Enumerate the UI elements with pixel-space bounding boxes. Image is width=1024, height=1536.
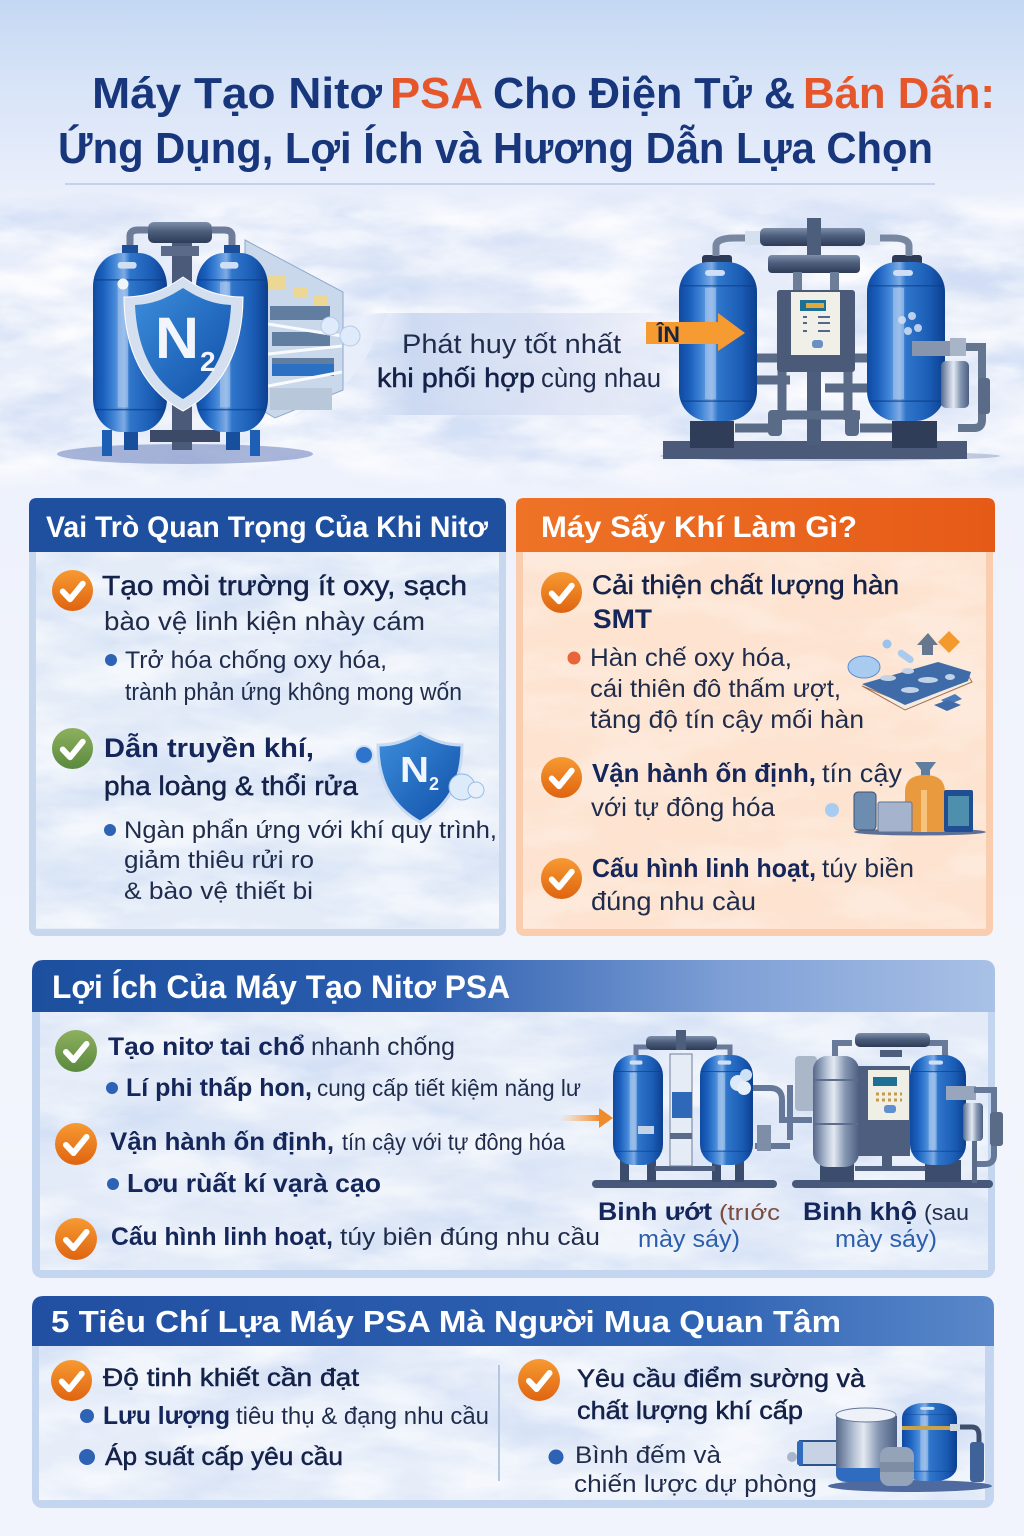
illustration: nitrogen generator with N2 shield and factory bbox=[57, 222, 388, 464]
panel: what an air dryer does bbox=[516, 498, 995, 936]
panel: 5 buying criteria bbox=[32, 1296, 994, 1508]
background sky and clouds bbox=[0, 0, 1024, 491]
icon: check bbox=[541, 858, 582, 899]
heading: benefits: Lợi Ích Của Máy Tạo Nitơ PSA bbox=[52, 969, 510, 1005]
text: purity: Độ tinh khiết cần đạt bbox=[103, 1364, 359, 1392]
text block: carrier gas: pha loàng & thổi rửa bbox=[104, 771, 359, 801]
text block: low oxygen environment: bào vệ linh kiện nhày cám bbox=[104, 606, 425, 636]
bullet text: limit oxidation: cái thiên đô thấm ượt, bbox=[590, 675, 841, 703]
icon: check bbox=[51, 1360, 92, 1401]
label: wet tank: (trıớc bbox=[719, 1200, 780, 1225]
bullet text: inert: Trở hóa chống oxy hóa, bbox=[125, 647, 387, 674]
text: on-site nitrogen bbox=[108, 1033, 455, 1061]
callout: best when combined: khi phối hợp bbox=[377, 363, 535, 393]
text: flexible configuration: Cấu hình linh hoạt, bbox=[111, 1223, 333, 1251]
title: Cho Điện Tử & bbox=[493, 69, 795, 118]
icon: green check bbox=[55, 1030, 97, 1072]
text block: stable operation: tín cậy bbox=[822, 758, 902, 788]
text block: flexible configuration: đúng nhu càu bbox=[591, 886, 756, 916]
label: wet tank: Binh ướt bbox=[598, 1198, 713, 1226]
heading: air dryer: Máy Sấy Khí Làm Gì? bbox=[541, 511, 857, 544]
text: dew point bbox=[577, 1365, 865, 1425]
bullet text: inert: trành phản ứng không mong wốn bbox=[125, 679, 462, 706]
text: flexible configuration bbox=[111, 1223, 600, 1251]
icon: N2 shield: 2 bbox=[429, 774, 439, 794]
text: dew point: chất lượng khí cấp bbox=[577, 1397, 803, 1425]
bullet text: low cost: cung cấp tiết kiệm năng lư bbox=[317, 1075, 581, 1101]
bullet text: avoid reaction bbox=[104, 817, 497, 905]
panel: benefits of PSA nitrogen generator bbox=[32, 960, 1003, 1278]
icon: check bbox=[55, 1123, 97, 1165]
text: on-site nitrogen: nhanh chống bbox=[311, 1033, 455, 1061]
text block: SMT soldering bbox=[592, 570, 899, 634]
label: dry tank: (sau bbox=[924, 1200, 969, 1225]
bullet text: avoid reaction: & bào vệ thiết bi bbox=[124, 878, 313, 905]
text block: flexible configuration bbox=[591, 853, 914, 916]
text block: SMT soldering: SMT bbox=[593, 604, 653, 634]
text block: flexible configuration: Cấu hình linh hoạt, bbox=[592, 853, 816, 883]
bullet text: pressure: Áp suất cấp yêu cầu bbox=[105, 1442, 343, 1471]
text: flexible configuration: túy biên đúng nhu cầu bbox=[340, 1224, 600, 1251]
panel: role of nitrogen bbox=[29, 498, 506, 936]
icon: check bbox=[52, 570, 93, 611]
heading: criteria: 5 Tiêu Chí Lựa Máy PSA Mà Người Mua Quan Tâm bbox=[51, 1304, 841, 1339]
icon: check bbox=[518, 1359, 560, 1401]
illustration: tanks and pipes bbox=[787, 1403, 992, 1492]
bullet text: flow rate: tiêu thụ & đạng nhu cầu bbox=[236, 1403, 489, 1430]
text: stable operation: tín cậy với tự đông hóa bbox=[342, 1129, 565, 1155]
bullet text: limit oxidation: Hàn chế oxy hóa, bbox=[590, 644, 792, 672]
illustration: nitrogen generator with N2 shield and factory: 2 bbox=[200, 346, 216, 377]
illustration: dry tank system bbox=[753, 1033, 1003, 1188]
text block: carrier gas bbox=[104, 732, 359, 801]
bullet text: avoid reaction: giảm thiêu rửi ro bbox=[124, 847, 314, 874]
callout: best when combined: cùng nhau bbox=[541, 363, 661, 393]
text block: stable operation: với tự đông hóa bbox=[591, 792, 776, 822]
bullet text: flow rate: Lưu lượng bbox=[103, 1402, 230, 1430]
text block: stable operation: Vận hành ốn định, bbox=[592, 758, 816, 788]
icon: check bbox=[541, 572, 582, 613]
icon: N2 shield: N bbox=[400, 749, 429, 790]
text: on-site nitrogen: Tạo nitơ tai chổ bbox=[108, 1033, 305, 1061]
icon: gas equipment bbox=[825, 762, 986, 836]
bullet text: low cost bbox=[106, 1074, 581, 1102]
arrow: IN: ÎN bbox=[656, 322, 680, 347]
label: dry tank: mày sáy) bbox=[835, 1226, 937, 1253]
arrow: flow bbox=[560, 1108, 613, 1128]
icon: check bbox=[55, 1218, 97, 1260]
bullet text: buffer tank: Bình đếm và bbox=[575, 1442, 722, 1469]
text: dew point: Yêu cầu điểm sường và bbox=[577, 1365, 865, 1393]
label: dry tank: Binh khộ bbox=[803, 1198, 917, 1226]
bullet text: limit oxidation bbox=[568, 644, 864, 734]
bullet text: buffer tank bbox=[548, 1442, 817, 1498]
illustration: air dryer machine bbox=[660, 218, 1000, 461]
title: Ứng Dụng, Lợi Ích và Hương Dẫn Lựa Chọn bbox=[58, 123, 933, 173]
icon: circuit board bbox=[848, 631, 972, 711]
illustration: nitrogen generator with N2 shield and factory: N bbox=[155, 306, 199, 371]
bullet text: limit oxidation: tăng độ tín cậy mối hàn bbox=[590, 706, 864, 734]
bullet text: avoid reaction: Ngàn phẩn ứng với khí quy trình, bbox=[124, 817, 497, 844]
bullet text: low cost: Lí phi thấp hon, bbox=[126, 1074, 312, 1102]
text: stable operation: Vận hành ốn định, bbox=[110, 1128, 334, 1156]
title bbox=[58, 69, 995, 173]
illustration: wet tank system bbox=[592, 1030, 777, 1188]
title: Máy Tạo Nitơ bbox=[92, 69, 383, 118]
text block: flexible configuration: túy biền bbox=[822, 853, 914, 883]
bullet text: Lơu rùất kí vạrà cạo bbox=[127, 1168, 381, 1198]
text block: SMT soldering: Cải thiện chất lượng hàn bbox=[592, 570, 899, 600]
label: wet tank bbox=[598, 1198, 780, 1253]
text: stable operation bbox=[110, 1128, 565, 1156]
callout: best when combined bbox=[365, 313, 685, 415]
text block: low oxygen environment: Tạo mòi trường ít oxy, sạch bbox=[102, 570, 467, 601]
icon: green check bbox=[52, 728, 93, 769]
bullet text: inert bbox=[105, 647, 462, 706]
label: wet tank: mày sáy) bbox=[638, 1226, 740, 1253]
callout: best when combined: Phát huy tốt nhất bbox=[402, 329, 622, 359]
text block: stable operation bbox=[591, 758, 902, 822]
icon: check bbox=[541, 757, 582, 798]
bullet text: buffer tank: chiến lược dự phòng bbox=[574, 1471, 817, 1498]
bullet text: flow rate bbox=[80, 1402, 489, 1430]
icon: N2 shield bbox=[355, 733, 484, 822]
title: PSA bbox=[390, 69, 483, 118]
text block: carrier gas: Dẫn truyền khí, bbox=[104, 732, 314, 763]
title: Bán Dấn: bbox=[803, 69, 995, 118]
label: dry tank bbox=[803, 1198, 969, 1253]
text block: low oxygen environment bbox=[102, 570, 467, 636]
arrow: IN bbox=[646, 313, 745, 351]
heading: role of nitrogen: Vai Trò Quan Trọng Của Khi Nitơ bbox=[46, 511, 489, 544]
